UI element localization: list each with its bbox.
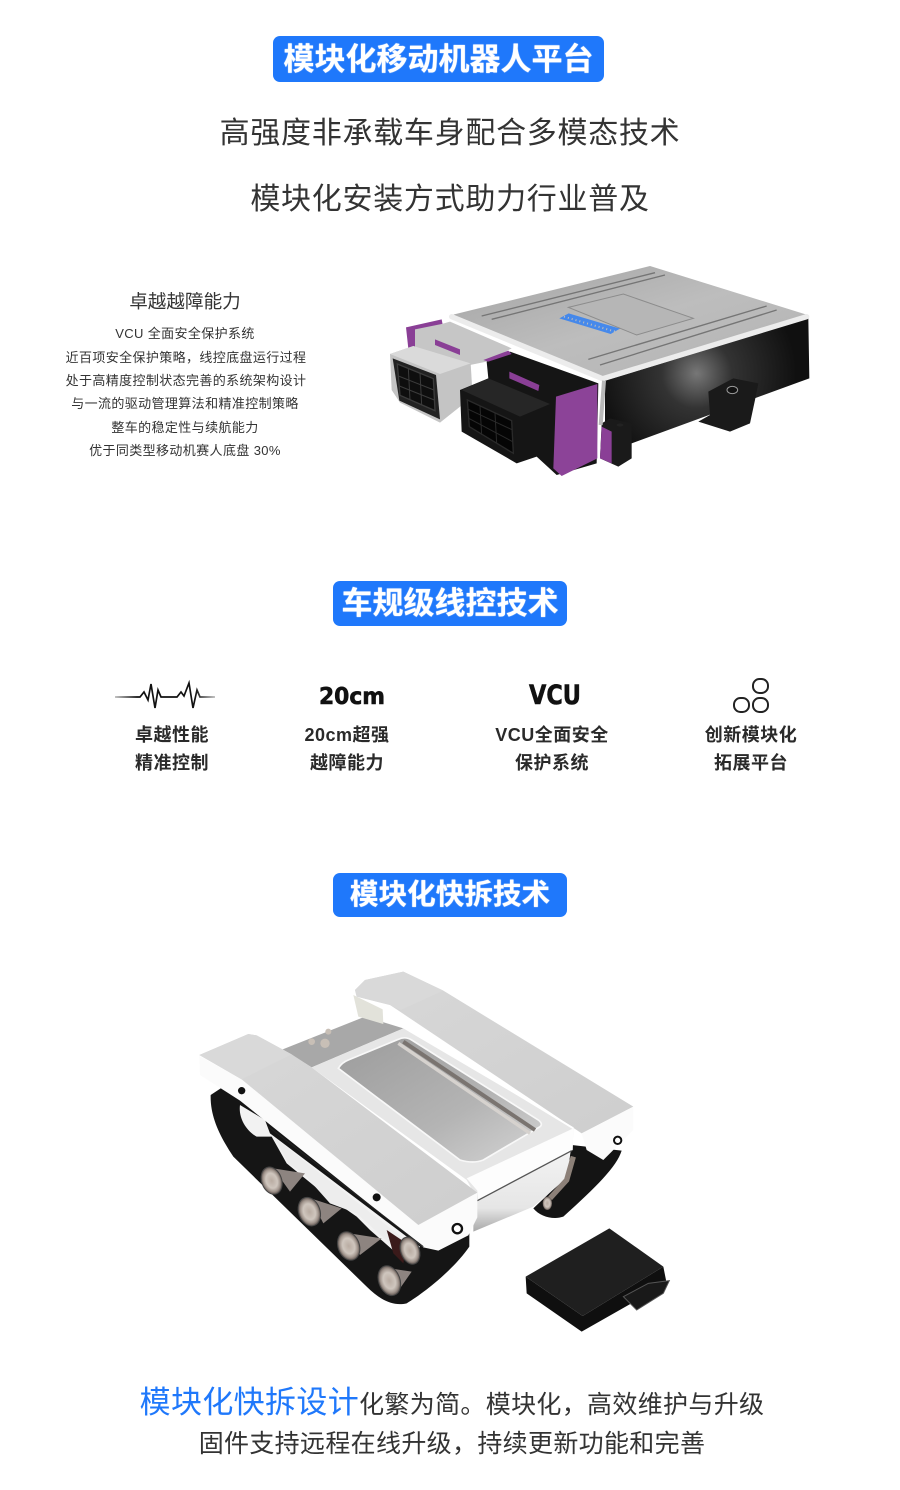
title badge: modular platform: 模块化移动机器人平台 — [284, 42, 594, 77]
feature label 3: 保护系统 — [515, 753, 589, 773]
heading line 1: 高强度非承载车身配合多模态技术 — [220, 117, 680, 150]
centre plate with window — [312, 1028, 573, 1201]
feature label 1: 精准控制 — [135, 753, 209, 773]
text lines: 整车的稳定性与续航能力 — [111, 420, 259, 435]
section badge: quick release — [333, 873, 567, 917]
detached control module — [526, 1228, 669, 1332]
bottom caption line 1: 模块化快拆设计化繁为简。模块化，高效维护与升级 — [140, 1385, 764, 1420]
text lines: 与一流的驱动管理算法和精准控制策略 — [71, 396, 299, 411]
right track — [533, 1145, 622, 1218]
icon: VCU: VCU — [529, 680, 581, 711]
heading line 2: 模块化安装方式助力行业普及 — [250, 183, 650, 216]
text lines: 优于同类型移动机赛人底盘 30% — [89, 443, 281, 458]
feature label 1 — [135, 725, 209, 773]
left track — [211, 1087, 469, 1304]
feature label 1: 卓越性能 — [135, 725, 209, 745]
lower centre box — [473, 1153, 573, 1232]
feature label 2: 越障能力 — [310, 753, 384, 773]
icon: pulse line — [115, 683, 215, 708]
feature label 2: 20cm超强 — [304, 725, 390, 745]
feature label 3: VCU全面安全 — [495, 725, 609, 745]
icon: modular circles — [734, 679, 768, 712]
white bracket — [353, 995, 383, 1024]
left rail — [199, 1034, 477, 1251]
feature label 4 — [705, 725, 797, 773]
feature label 2 — [304, 725, 390, 773]
robot chassis illustration — [199, 972, 669, 1332]
text lines — [66, 326, 306, 458]
rear mounting plate — [283, 1017, 403, 1067]
bottom caption line 2: 固件支持远程在线升级，持续更新功能和完善 — [199, 1430, 705, 1458]
right rail — [355, 972, 633, 1160]
text heading: 卓越越障能力 — [129, 291, 241, 312]
text lines: 处于高精度控制状态完善的系统架构设计 — [66, 373, 306, 388]
feature label 3 — [495, 725, 609, 773]
text lines: 近百项安全保护策略，线控底盘运行过程 — [66, 350, 306, 365]
ECU controller illustration — [390, 266, 809, 476]
side frame and wheels — [240, 1105, 424, 1299]
section badge: quick release: 模块化快拆技术 — [350, 879, 550, 911]
section badge: drive-by-wire: 车规级线控技术 — [342, 586, 558, 621]
icon: 20cm: 20cm — [319, 684, 385, 710]
feature label 4: 拓展平台 — [714, 753, 788, 773]
ECU black connector — [460, 351, 598, 476]
text lines: VCU 全面安全保护系统 — [115, 326, 255, 341]
ECU housing — [452, 266, 809, 467]
text block: obstacle ability — [66, 291, 306, 458]
feature label 4: 创新模块化 — [705, 725, 797, 745]
ECU grey connector — [390, 319, 512, 423]
